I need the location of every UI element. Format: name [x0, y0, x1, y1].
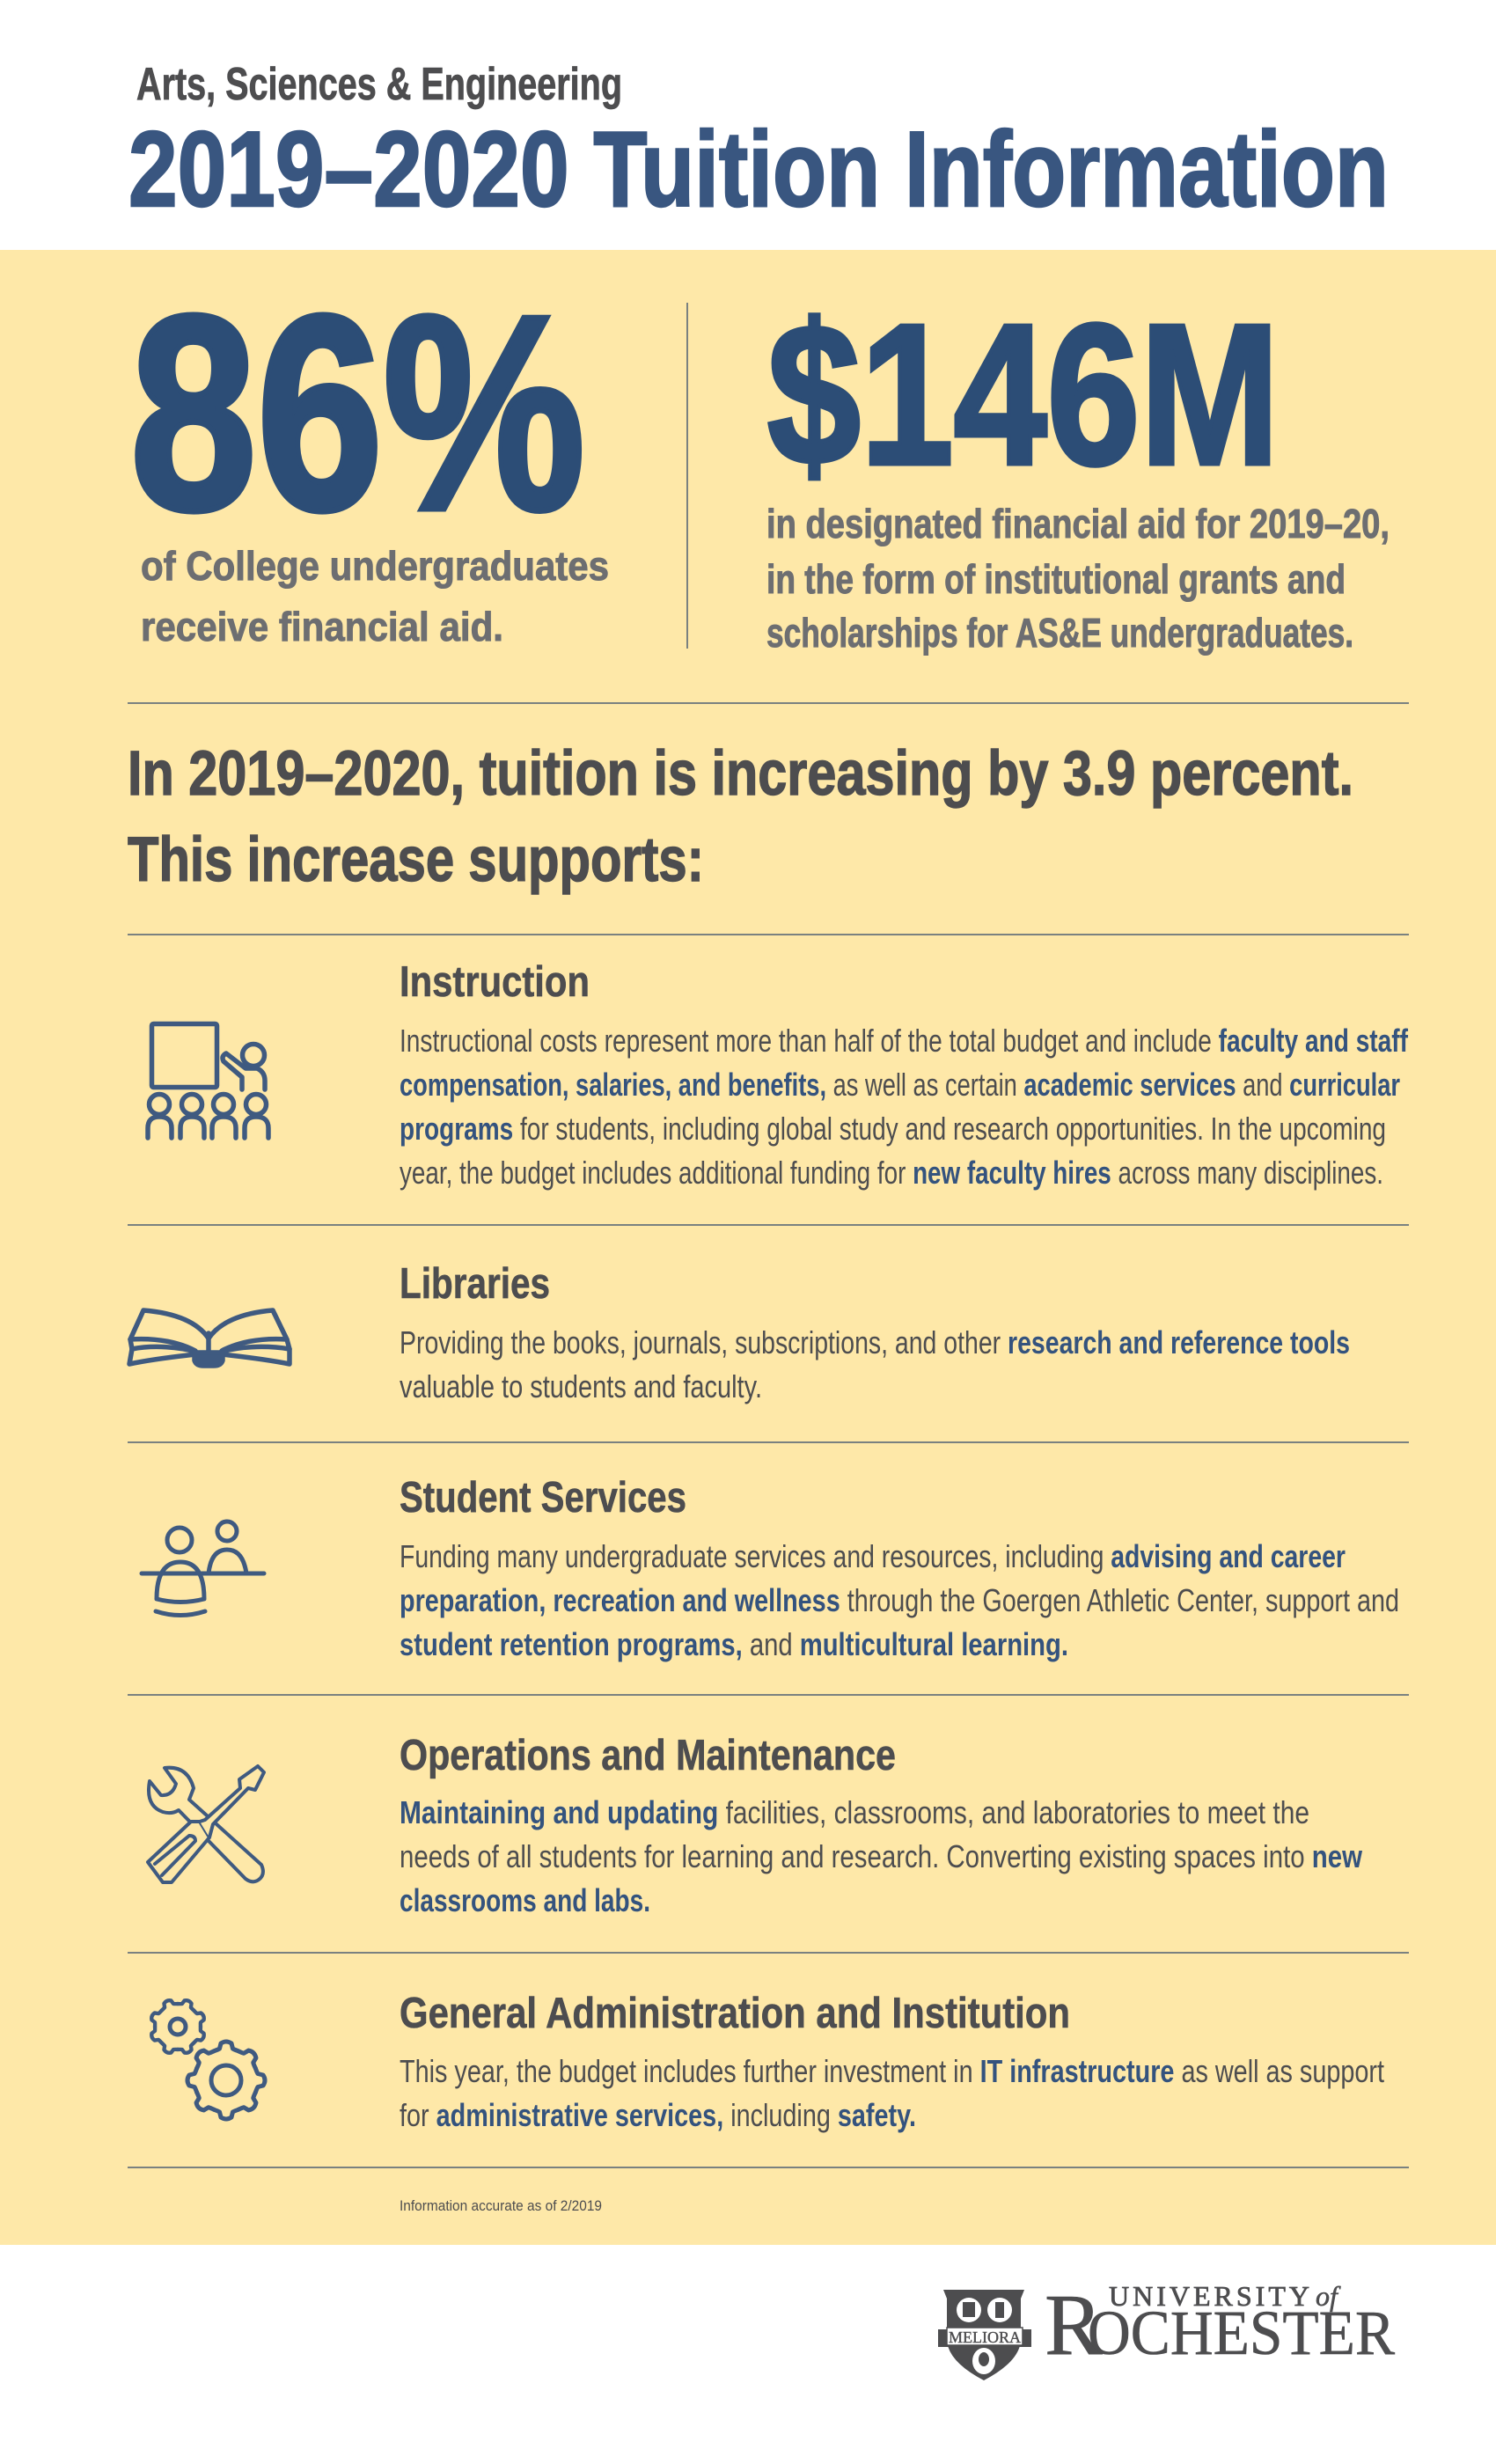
Libraries body: Providing the books, journals, subscriptions, and other research and reference tools: [400, 1324, 1350, 1360]
logo: University of Rochester: [938, 2276, 1395, 2380]
Student Services body: [400, 1538, 1399, 1662]
panel: Operations and Maintenance: [148, 1732, 1363, 1918]
General Administration body: [400, 2053, 1384, 2133]
Instruction body: year, the budget includes additional funding for new faculty hires across many disciplines.: [400, 1155, 1383, 1191]
icon: classroom: [148, 1024, 268, 1138]
$146M caption: in designated financial aid for 2019–20,: [766, 501, 1390, 546]
wordmark: R: [1045, 2276, 1103, 2373]
Student Services body: student retention programs, and multicultural learning.: [400, 1626, 1068, 1662]
wordmark: OCHESTER: [1088, 2298, 1395, 2368]
86% caption: of College undergraduates: [141, 543, 609, 589]
big number 86%: 86%: [130, 258, 585, 568]
Student Services heading: Student Services: [400, 1474, 686, 1522]
Operations body: [400, 1794, 1363, 1918]
wordmark: of: [1316, 2280, 1341, 2312]
wordmark: [1045, 2276, 1395, 2373]
Operations body: needs of all students for learning and research. Converting existing spaces into new: [400, 1838, 1363, 1874]
icon: open book: [129, 1310, 290, 1366]
icon: gears: [149, 1998, 265, 2119]
Libraries body: [400, 1324, 1350, 1404]
General Administration body: for administrative services, including safety.: [400, 2097, 916, 2133]
footnote: Information accurate as of 2/2019: [400, 2197, 602, 2214]
heading: tuition increase: [128, 739, 1353, 895]
Operations body: classrooms and labs.: [400, 1882, 650, 1918]
Instruction body: compensation, salaries, and benefits, as well as certain academic services and curricular: [400, 1067, 1400, 1103]
eyebrow: Arts, Sciences & Engineering: Arts, Sciences & Engineering: [136, 59, 622, 110]
icon: people at table: [142, 1522, 264, 1616]
Libraries body: valuable to students and faculty.: [400, 1368, 762, 1404]
Operations heading: Operations and Maintenance: [400, 1732, 896, 1779]
Libraries heading: Libraries: [400, 1260, 550, 1308]
86% caption: receive financial aid.: [141, 604, 503, 649]
$146M caption: in the form of institutional grants and: [766, 556, 1346, 602]
heading: tuition increase: This increase supports:: [128, 825, 704, 895]
icon: shield crest: [938, 2290, 1031, 2380]
Instruction body: Instructional costs represent more than half of the total budget and include faculty and staff: [400, 1023, 1409, 1059]
panel: $146M statistic: [766, 283, 1390, 656]
General Administration body: This year, the budget includes further investment in IT infrastructure as well as support: [400, 2053, 1384, 2089]
wordmark: UNIVERSITY: [1109, 2280, 1309, 2312]
Instruction heading: Instruction: [400, 958, 590, 1006]
header: [128, 59, 1389, 229]
icon: wrench and screwdriver: [148, 1766, 264, 1882]
panel: Libraries: [129, 1260, 1350, 1404]
Instruction body: [400, 1023, 1409, 1191]
panel: 86 percent statistic: [130, 258, 609, 649]
panel: Instruction: [148, 958, 1409, 1191]
Operations body: Maintaining and updating facilities, classrooms, and laboratories to meet the: [400, 1794, 1309, 1830]
$146M caption: [766, 501, 1390, 656]
General Administration heading: General Administration and Institution: [400, 1990, 1070, 2037]
panel: General Administration and Institution: [149, 1990, 1384, 2133]
icon: shield crest: MELIORA: [949, 2328, 1021, 2346]
panel: Student Services: [142, 1474, 1399, 1662]
Student Services body: Funding many undergraduate services and resources, including advising and career: [400, 1538, 1346, 1574]
big number $146M: $146M: [767, 283, 1280, 507]
86% caption: [141, 543, 609, 649]
